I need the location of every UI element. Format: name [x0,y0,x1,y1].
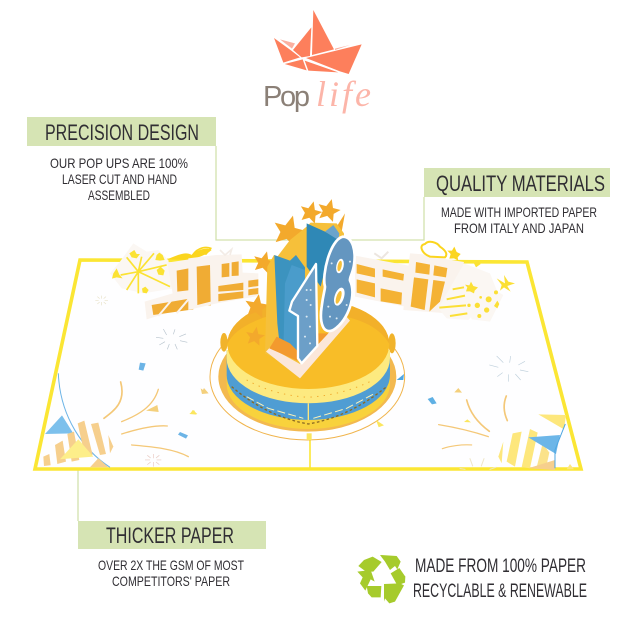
callout: precision design: LASER CUT AND HAND [62,171,177,187]
second left gift and right gift (behind cake) [188,247,431,312]
right gift and party hat pop-ups [403,242,515,322]
icon: origami boat [274,10,362,74]
connector lines [78,146,424,521]
card base with yellow border [35,260,581,469]
pop-up card [35,196,581,470]
right print: party popper and confetti [428,356,574,470]
number 1 [289,264,317,363]
inner teal folds [274,223,339,358]
cake plate and ring [190,313,405,440]
heading band [27,117,216,146]
callout: precision design: PRECISION DESIGN [45,120,199,145]
heading band [424,168,610,197]
left gift two [188,247,258,310]
callout: precision design: ASSEMBLED [88,187,150,203]
callout: precision design [27,117,216,203]
right gift one [355,252,431,312]
left firework and gift pop-ups [110,243,220,319]
body text: OUR POP UPS ARE 100% [50,155,188,171]
number 8 [321,237,355,331]
wordmark: Pop [263,81,310,113]
cake tiers [220,299,396,429]
plinth for the numbers [266,315,350,378]
body text: OVER 2X THE GSM OF MOST [98,557,244,573]
left print: party popper and confetti [43,296,209,467]
birthday cake with 18 [190,196,405,440]
callout: quality materials [424,168,610,236]
callout: thicker paper: THICKER PAPER [106,523,234,548]
callout: thicker paper [78,521,266,589]
callout: quality materials: FROM ITALY AND JAPAN [454,220,584,236]
heading band [78,521,266,549]
icon: recycle arrows [357,555,405,603]
logo: Poplife boat and wordmark [263,10,371,114]
stars [243,196,345,346]
yellow backing panel [265,223,344,372]
recycling badge [357,555,587,603]
callout: thicker paper: COMPETITORS' PAPER [112,573,230,589]
logo: Poplife boat and wordmark: life [316,74,371,114]
